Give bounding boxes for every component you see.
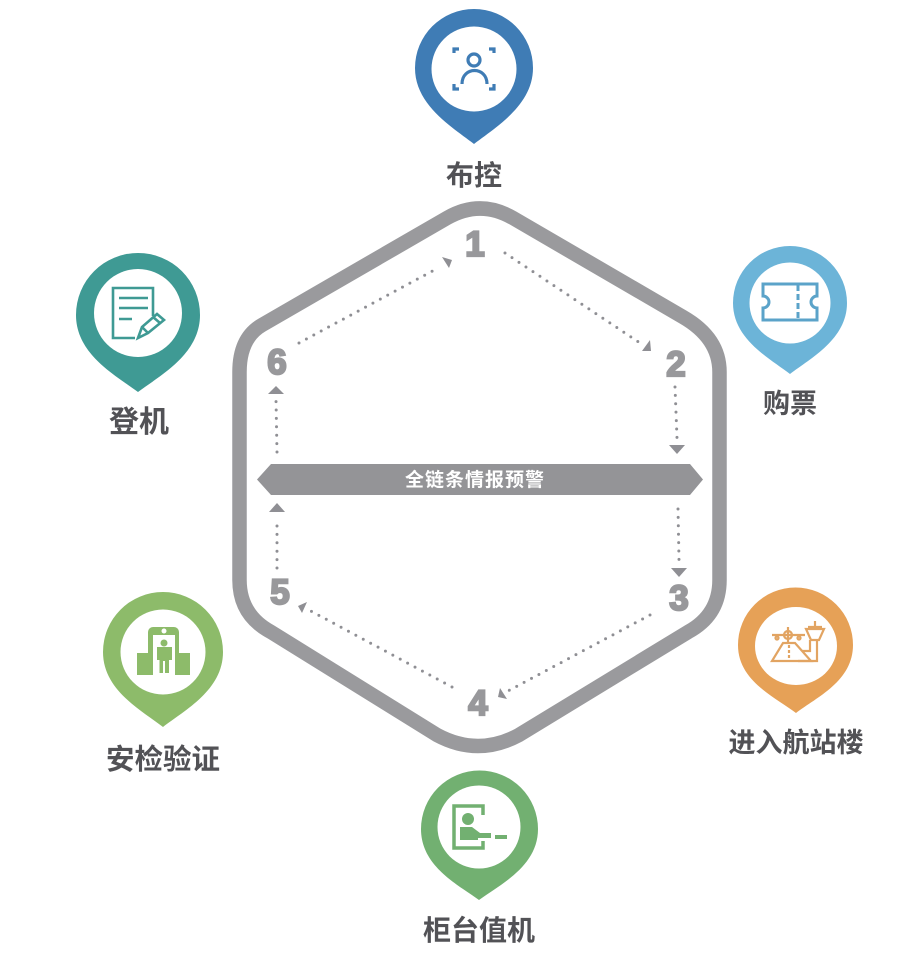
arrow: 4 to 5 <box>298 602 452 687</box>
icon: face scan <box>454 49 494 89</box>
pin: orange <box>738 588 853 713</box>
inner circle <box>750 262 830 344</box>
inner circle <box>755 607 837 685</box>
label: 柜台值机 <box>423 914 535 946</box>
step number 6: 6 <box>267 343 287 382</box>
icon: ticket <box>763 284 817 320</box>
arrow: banner to 3 <box>671 509 687 577</box>
label: 安检验证 <box>106 744 220 776</box>
marker: 购票 <box>733 246 847 419</box>
banner: full chain warning <box>257 464 703 495</box>
arrow: 6 to 1 <box>299 257 452 343</box>
pin: lime green <box>103 592 223 727</box>
arrow: 1 to 2 <box>505 253 651 351</box>
icon: form and pencil <box>113 288 164 338</box>
pin: light blue <box>733 246 847 374</box>
label: 布控 <box>446 160 502 191</box>
marker: 布控 <box>415 9 533 191</box>
marker: 柜台值机 <box>421 770 538 946</box>
pin: green <box>421 770 538 900</box>
inner circle <box>120 610 206 694</box>
step number 5: 5 <box>270 573 290 612</box>
step number 3: 3 <box>669 579 689 618</box>
icon: airport <box>772 621 824 661</box>
arrow: banner to 6 <box>268 386 284 452</box>
arrow: 5 to banner <box>269 503 285 568</box>
label: 进入航站楼 <box>728 728 864 758</box>
inner circle <box>94 269 182 357</box>
label: 购票 <box>763 389 817 419</box>
marker: 安检验证 <box>103 592 223 776</box>
marker: 进入航站楼 <box>728 588 864 758</box>
arrow: 3 to 4 <box>498 615 650 699</box>
step number 4: 4 <box>468 684 488 723</box>
icon: security gate <box>137 627 190 675</box>
icon: check-in counter <box>454 806 507 848</box>
inner circle <box>432 26 516 112</box>
hexagon frame <box>240 208 720 746</box>
banner: full chain warning: 全链条情报预警 <box>405 468 545 491</box>
step number 2: 2 <box>666 345 686 384</box>
pin: blue <box>415 9 533 144</box>
inner circle <box>438 786 520 868</box>
marker: 登机 <box>76 253 200 439</box>
label: 登机 <box>109 406 169 439</box>
step number 1: 1 <box>465 225 485 264</box>
arrow: 2 to banner <box>669 387 685 454</box>
pin: teal <box>76 253 200 392</box>
